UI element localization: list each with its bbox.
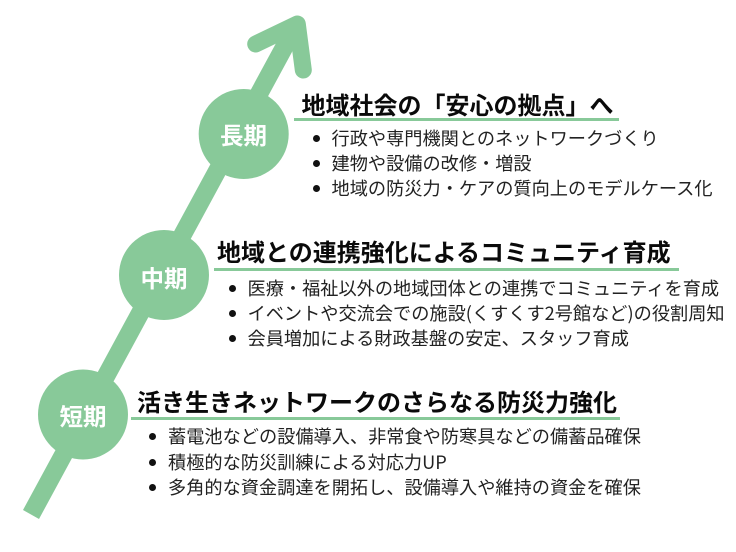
item: イベントや交流会での施設(くすくす2号館など)の役割周知 [248, 300, 725, 326]
heading rule [131, 417, 620, 420]
label: short term: 短期 [60, 398, 106, 432]
heading: 地域社会の「安心の拠点」へ [302, 86, 614, 121]
item: 行政や専門機関とのネットワークづくり [332, 125, 659, 151]
label: mid term: 中期 [140, 260, 188, 294]
heading: 活き生きネットワークのさらなる防災力強化 [137, 383, 617, 418]
bullet list [149, 423, 641, 500]
heading rule [214, 268, 679, 271]
circle: short term [38, 370, 128, 460]
panel: mid term [214, 233, 725, 350]
label: long term: 長期 [220, 117, 267, 151]
item: 医療・福祉以外の地域団体との連携でコミュニティを育成 [248, 274, 719, 300]
item: 蓄電池などの設備導入、非常食や防寒具などの備蓄品確保 [168, 423, 641, 449]
item: 積極的な防災訓練による対応力UP [168, 448, 447, 474]
arrow shaft [23, 27, 301, 519]
bullet list [313, 125, 713, 201]
bullet list [229, 274, 725, 350]
circle: mid term [119, 230, 209, 320]
panel: short term [131, 383, 641, 500]
heading: 地域との連携強化によるコミュニティ育成 [217, 233, 671, 268]
panel: long term [294, 86, 713, 201]
arrow head [256, 24, 303, 70]
item: 地域の防災力・ケアの質向上のモデルケース化 [332, 175, 713, 201]
item: 多角的な資金調達を開拓し、設備導入や維持の資金を確保 [168, 474, 641, 500]
item: 会員増加による財政基盤の安定、スタッフ育成 [248, 324, 629, 350]
item: 建物や設備の改修・増設 [332, 150, 532, 176]
circle: long term [199, 89, 289, 179]
heading rule [294, 118, 619, 121]
